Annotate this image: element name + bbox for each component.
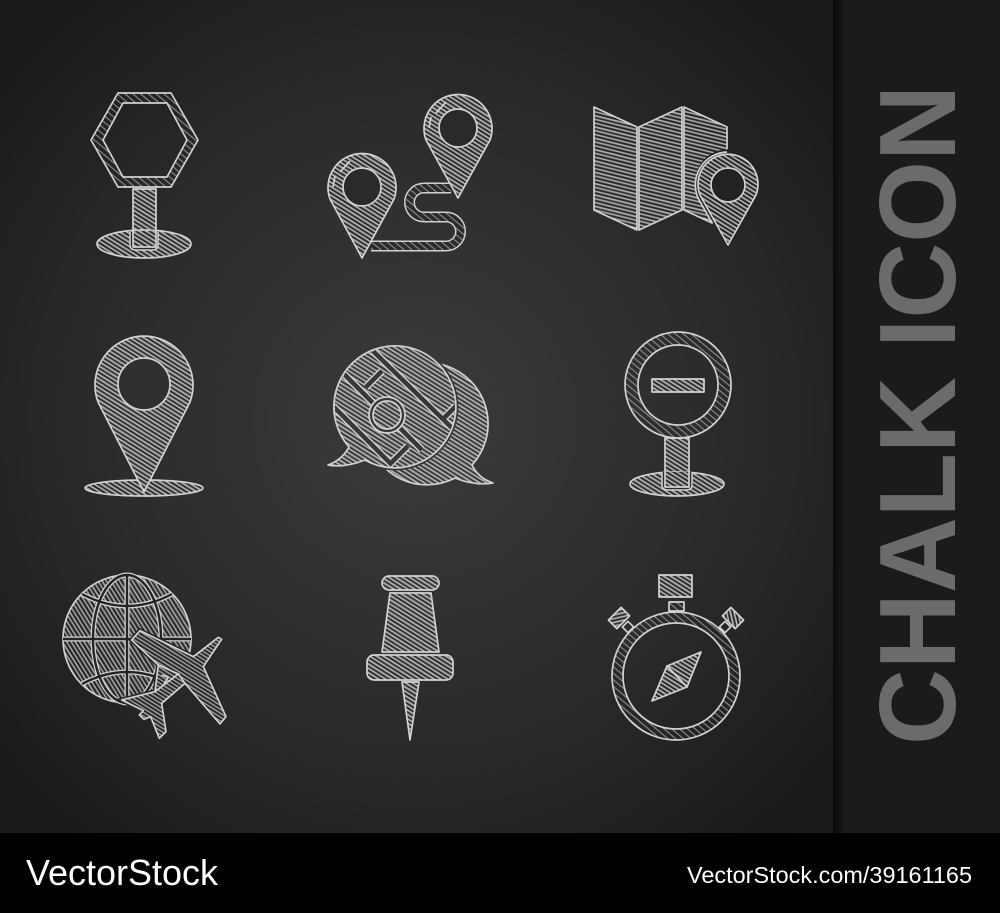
icon: folded map with pin <box>594 107 761 249</box>
vertical title: CHALK ICON: CHALK ICON <box>857 85 979 745</box>
footer brand: VectorStock <box>26 852 219 893</box>
main chalkboard panel <box>0 0 833 833</box>
icon: globe with airplane <box>63 575 226 738</box>
icon: no-entry round sign <box>625 332 731 496</box>
right title panel <box>833 0 1000 833</box>
footer bar <box>0 833 1000 913</box>
icon: push pin <box>367 576 453 740</box>
footer image id: VectorStock.com/39161165 <box>687 862 972 888</box>
icon: chat bubbles with map <box>328 346 493 485</box>
icon: hexagon road sign <box>91 93 198 258</box>
icon: stopwatch compass <box>608 575 744 740</box>
icon: location pin on ground <box>85 336 203 496</box>
icon: route between two location pins <box>328 95 492 258</box>
